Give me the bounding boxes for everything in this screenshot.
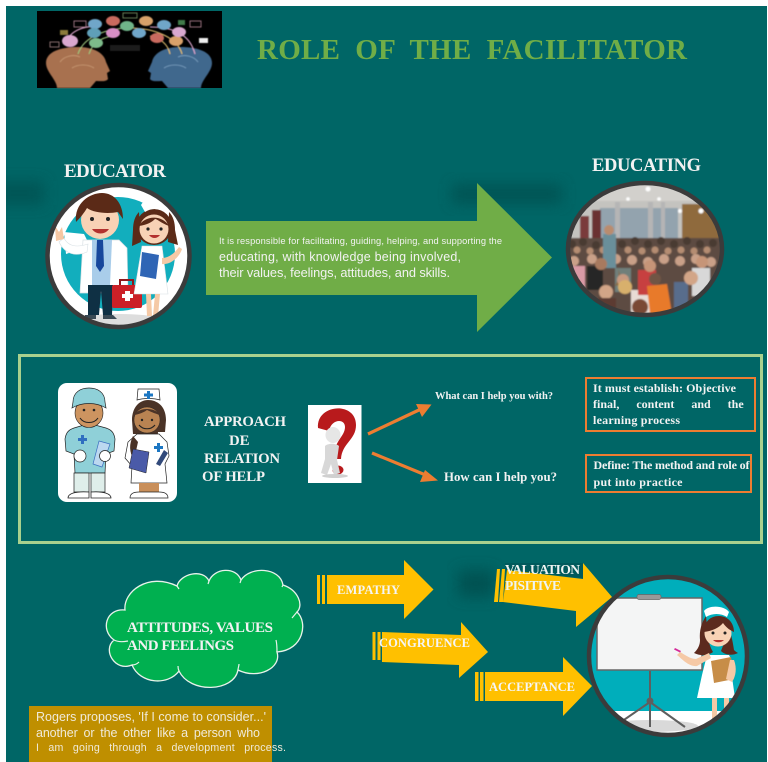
- arrow text: educating, with knowledge being involved,: [219, 250, 461, 264]
- callout: objective: [586, 378, 755, 431]
- female nurse: [132, 400, 166, 462]
- arrow: to second question: [372, 453, 438, 482]
- icon: question mark figure: [308, 405, 362, 483]
- arrow text: their values, feelings, attitudes, and skills.: [219, 265, 450, 280]
- question: what: What can I help you with?: [435, 391, 553, 402]
- nurse: [712, 698, 729, 719]
- arrow: positive valuation: PISITIVE: [505, 578, 561, 593]
- callout: objective: It must establish: Objective: [593, 381, 737, 395]
- icon: doctor and nurse circle: [48, 185, 190, 327]
- arrow: congruence: [372, 622, 488, 678]
- doctor: [80, 240, 128, 293]
- question: how: How can I help you?: [444, 470, 557, 484]
- callout: method: put into practice: [594, 475, 683, 489]
- callout: method: [586, 455, 751, 492]
- arrow: acceptance: ACCEPTANCE: [489, 680, 575, 694]
- heading: approach de relation of help: APPROACH: [204, 414, 286, 430]
- heading: approach de relation of help: [202, 414, 286, 485]
- arrow: positive valuation: VALUATION: [505, 562, 580, 577]
- callout: objective: final, content and the: [593, 397, 744, 411]
- arrow: empathy: EMPATHY: [337, 583, 400, 597]
- photo: audience in a hall: [566, 180, 724, 318]
- arrow text: It is responsible for facilitating, guiding, helping, and supporting the: [219, 236, 502, 246]
- icon: nurse pair card: [58, 383, 177, 502]
- arrow text: [219, 236, 502, 280]
- arrow: congruence: CONGRUENCE: [379, 636, 470, 650]
- arrow: empathy: [317, 560, 434, 619]
- first aid case: [112, 285, 142, 308]
- heading: educator: EDUCATOR: [64, 161, 166, 182]
- heading: approach de relation of help: OF HELP: [202, 469, 265, 485]
- male nurse: [65, 425, 115, 473]
- whiteboard: [597, 598, 702, 670]
- cloud: attitudes values and feelings: [106, 570, 303, 687]
- cloud: attitudes values and feelings: ATTITUDES, VALUES: [127, 620, 273, 636]
- shadow smudge left: [6, 180, 44, 206]
- title: ROLE OF THE FACILITATOR: [257, 34, 688, 66]
- arrow: acceptance: [475, 657, 592, 716]
- icon: nurse presenting at whiteboard: [585, 577, 750, 741]
- panel: approach to helping relationship: [20, 356, 762, 542]
- callout: rogers quote: I am going through a development process.: [36, 742, 286, 754]
- arrow: positive valuation: [458, 562, 612, 627]
- heading: approach de relation of help: DE: [229, 433, 250, 449]
- callout: rogers quote: Rogers proposes, 'If I come to consider...': [36, 710, 266, 724]
- callout: method: Define: The method and role of: [594, 458, 750, 472]
- callout: objective: learning process: [593, 413, 680, 427]
- cloud: attitudes values and feelings: AND FEELINGS: [127, 638, 234, 654]
- heading: approach de relation of help: RELATION: [204, 451, 280, 467]
- shadow smudge right: [452, 184, 562, 204]
- image: two heads sharing ideas: [37, 11, 222, 88]
- heading: educating: EDUCATING: [592, 156, 701, 176]
- arrow: to first question: [368, 404, 432, 434]
- callout: rogers quote: [29, 706, 286, 762]
- arrow: description of educator role: [206, 183, 552, 332]
- callout: rogers quote: another or the other like a person who: [36, 726, 260, 740]
- nurse: [134, 246, 168, 294]
